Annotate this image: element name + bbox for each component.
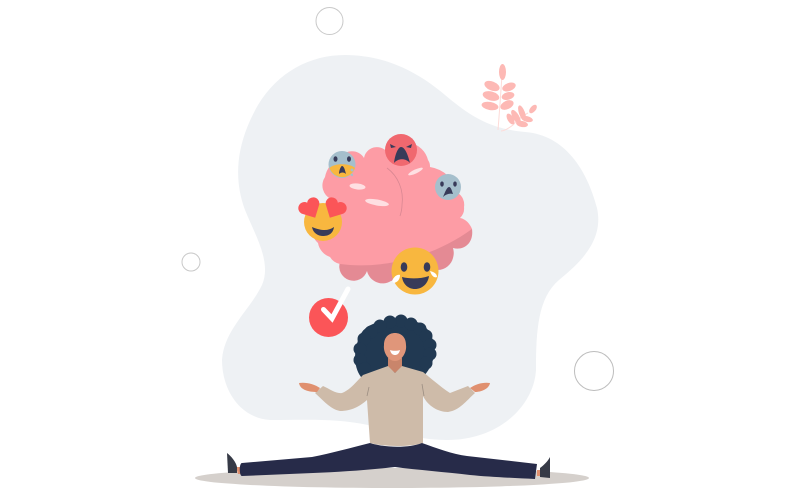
- emoji: laughing: [392, 248, 438, 294]
- brain crease: [387, 168, 402, 216]
- decorative circle: right: [574, 352, 614, 390]
- torso and arms: [315, 366, 475, 446]
- person: [227, 314, 550, 479]
- right hand: [470, 383, 490, 392]
- legs: [240, 443, 537, 479]
- brain highlights: [349, 183, 366, 190]
- neck: [388, 358, 402, 373]
- background blob: [222, 55, 598, 440]
- ground shadow: [195, 468, 589, 488]
- brain: [311, 142, 472, 283]
- smile: [390, 350, 400, 355]
- left shoe: [227, 453, 237, 473]
- emoji: fearful right: [435, 174, 461, 200]
- sleeve creases: [367, 384, 424, 396]
- ankles: [236, 467, 543, 476]
- head: [384, 333, 406, 361]
- decorative circle: top: [316, 8, 343, 34]
- check badge: [309, 289, 348, 337]
- hair: [354, 314, 436, 377]
- emoji: heart eyes: [296, 195, 349, 241]
- decorative circle: left: [182, 253, 200, 271]
- brain top: [311, 142, 472, 265]
- plant: [481, 64, 538, 131]
- brain underside: [339, 229, 472, 283]
- emoji: fearful left: [328, 151, 356, 178]
- emoji: angry: [385, 134, 417, 166]
- left hand: [299, 383, 320, 392]
- right shoe: [540, 457, 550, 478]
